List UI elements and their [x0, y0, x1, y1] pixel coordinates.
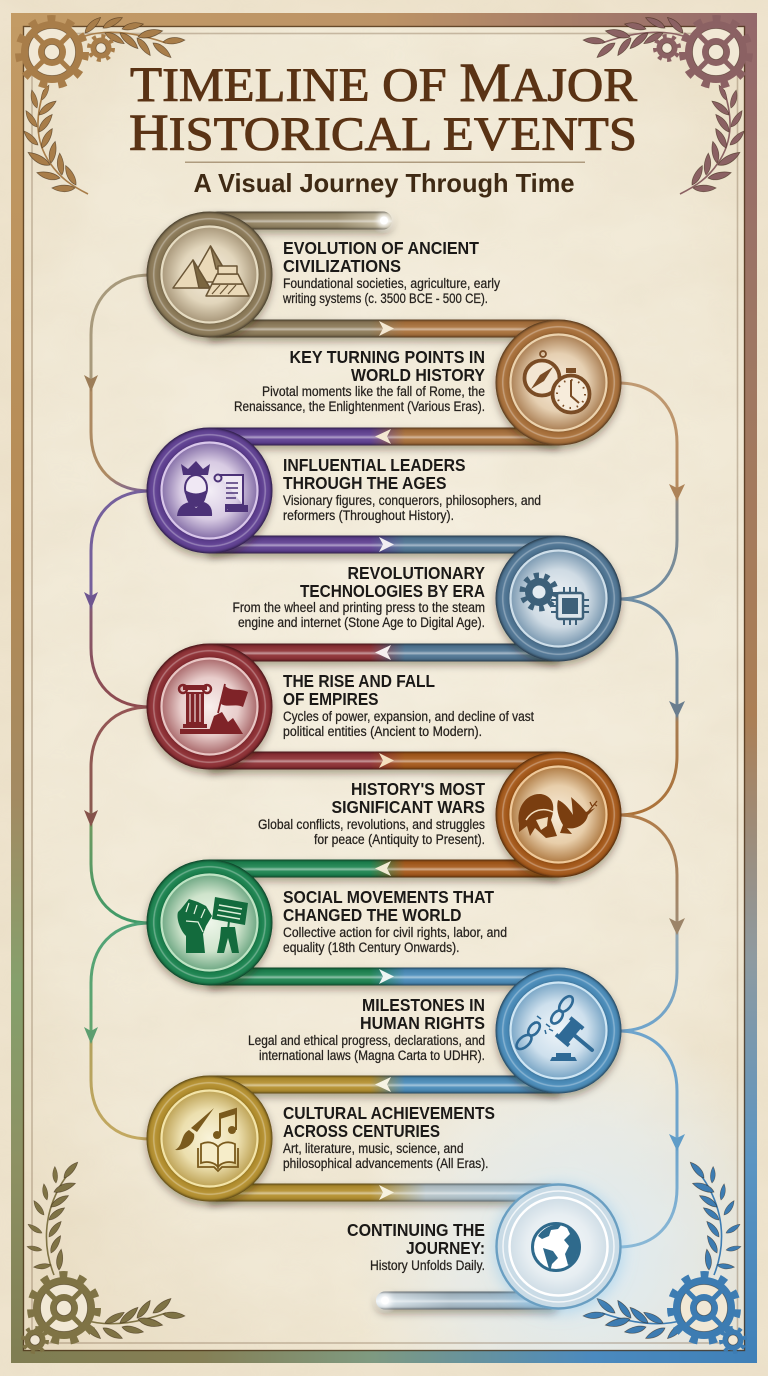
description: philosophical advancements (All Eras).: [283, 1156, 488, 1171]
heading: [283, 1103, 495, 1141]
icon: broken chain and gavel: [514, 994, 592, 1061]
description: Foundational societies, agriculture, early: [283, 276, 500, 291]
description: [283, 1141, 488, 1171]
icon: compass and stopwatch: [524, 351, 590, 412]
panel: step 8 human rights: [248, 968, 622, 1094]
icon: column, flag and rubble: [179, 684, 248, 734]
description: [283, 493, 541, 523]
heading: THROUGH THE AGES: [283, 473, 446, 493]
connector: technologies to wars: [618, 599, 685, 815]
medallion: [496, 320, 622, 446]
corner ornament: top left: [18, 15, 185, 194]
heading: EVOLUTION OF ANCIENT: [283, 238, 479, 258]
description: writing systems (c. 3500 BCE - 500 CE).: [282, 291, 488, 306]
heading: HISTORY'S MOST: [351, 779, 485, 799]
heading: [283, 887, 494, 925]
band: start: [209, 212, 392, 230]
description: for peace (Antiquity to Present).: [314, 832, 485, 847]
title divider: [185, 162, 585, 163]
heading: CONTINUING THE: [347, 1220, 485, 1240]
description: [258, 817, 485, 847]
title: [129, 52, 637, 162]
band: end: [376, 1292, 559, 1310]
connector: turning points to technologies: [618, 383, 685, 599]
serpentine timeline track: [209, 212, 559, 1310]
heading: HUMAN RIGHTS: [360, 1013, 485, 1033]
description: [283, 709, 534, 739]
panel: step 6 significant wars: [258, 752, 622, 878]
band: step 4 to 5: [209, 644, 559, 662]
band: step 2 to 3: [209, 428, 559, 446]
heading: [290, 347, 485, 385]
panel: step 10 continuing the journey: [347, 1184, 622, 1310]
band: step 8 to 9: [209, 1076, 559, 1094]
heading: [283, 671, 435, 709]
description: [248, 1033, 485, 1063]
description: Visionary figures, conquerors, philosophers, and: [283, 493, 541, 508]
band: step 3 to 4: [209, 536, 559, 554]
band: step 7 to 8: [209, 968, 559, 986]
heading: [332, 779, 485, 817]
corner ornament: bottom left: [23, 1160, 185, 1352]
subtitle: A Visual Journey Through Time: [194, 168, 574, 198]
icon: paintbrush, music note and book: [175, 1108, 238, 1171]
icon: crowned leader and scroll: [177, 461, 248, 516]
description: [234, 384, 485, 414]
medallion: [146, 212, 272, 338]
title: HISTORICAL EVENTS: [129, 105, 637, 162]
description: engine and internet (Stone Age to Digital Age).: [238, 615, 485, 630]
description: reformers (Throughout History).: [283, 508, 454, 523]
panel: step 4 revolutionary technologies: [232, 536, 622, 662]
medallion: [146, 1076, 272, 1202]
heading: TECHNOLOGIES BY ERA: [300, 581, 485, 601]
connector lines and arrows: [84, 275, 685, 1247]
description: From the wheel and printing press to the steam: [232, 600, 485, 615]
band: step 5 to 6: [209, 752, 559, 770]
connector: wars to human rights: [618, 815, 685, 1031]
band: step 6 to 7: [209, 860, 559, 878]
heading: THE RISE AND FALL: [283, 671, 435, 691]
connector: leaders to empires: [84, 491, 150, 707]
medallion: [496, 968, 622, 1094]
panel: step 5 rise and fall of empires: [146, 644, 534, 770]
description: [283, 925, 507, 955]
medallion: [496, 536, 622, 662]
panel: step 9 cultural achievements: [146, 1076, 495, 1202]
icon: helmet and dove: [518, 794, 597, 838]
heading: MILESTONES IN: [362, 995, 485, 1015]
panel: step 7 social movements: [146, 860, 507, 986]
heading: [360, 995, 485, 1033]
description: Art, literature, music, science, and: [283, 1141, 464, 1156]
description: Renaissance, the Enlightenment (Various Eras).: [234, 399, 485, 414]
connector: empires to social movements: [84, 707, 150, 923]
heading: INFLUENTIAL LEADERS: [283, 455, 466, 475]
heading: WORLD HISTORY: [351, 365, 485, 385]
description: international laws (Magna Carta to UDHR).: [259, 1048, 485, 1063]
heading: CHANGED THE WORLD: [283, 905, 462, 925]
heading: [300, 563, 485, 601]
description: Cycles of power, expansion, and decline of vast: [283, 709, 534, 724]
corner ornament: bottom right: [583, 1160, 745, 1352]
description: [232, 600, 485, 630]
corner ornament: top right: [583, 15, 750, 194]
connector: social movements to cultural achievements: [84, 923, 150, 1139]
heading: [283, 238, 479, 276]
medallion: [146, 860, 272, 986]
medallion: [496, 752, 622, 878]
description: political entities (Ancient to Modern).: [283, 724, 482, 739]
medallion: [496, 1184, 622, 1310]
heading: ACROSS CENTURIES: [283, 1121, 440, 1141]
heading: JOURNEY:: [406, 1238, 485, 1258]
description: Global conflicts, revolutions, and struggles: [258, 817, 485, 832]
icon: raised fist and protest sign: [177, 897, 248, 953]
heading: SIGNIFICANT WARS: [332, 797, 485, 817]
icon: pyramids and ziggurat: [173, 246, 249, 296]
title: TIMELINE OF MAJOR: [130, 52, 637, 113]
description: Pivotal moments like the fall of Rome, the: [262, 384, 485, 399]
icon: gear and microchip: [522, 576, 589, 625]
description: Collective action for civil rights, labor, and: [283, 925, 507, 940]
band: step 9 to 10: [209, 1184, 559, 1202]
description: Legal and ethical progress, declarations, and: [248, 1033, 485, 1048]
heading: CIVILIZATIONS: [283, 256, 401, 276]
icon: globe: [532, 1224, 580, 1272]
panel: step 3 influential leaders: [146, 428, 541, 554]
heading: SOCIAL MOVEMENTS THAT: [283, 887, 494, 907]
heading: REVOLUTIONARY: [348, 563, 485, 583]
heading: [347, 1220, 485, 1258]
panel: step 1 ancient civilizations: [146, 212, 500, 338]
band: step 1 to 2: [209, 320, 559, 338]
heading: CULTURAL ACHIEVEMENTS: [283, 1103, 495, 1123]
heading: [283, 455, 466, 493]
panel: step 2 turning points: [234, 320, 622, 446]
connector: human rights to continuing: [618, 1031, 685, 1247]
description: History Unfolds Daily.: [370, 1258, 485, 1273]
connector: civilizations to leaders: [84, 275, 150, 491]
description: [282, 276, 500, 306]
description: equality (18th Century Onwards).: [283, 940, 460, 955]
heading: KEY TURNING POINTS IN: [290, 347, 485, 367]
heading: OF EMPIRES: [283, 689, 378, 709]
medallion: [146, 428, 272, 554]
medallion: [146, 644, 272, 770]
